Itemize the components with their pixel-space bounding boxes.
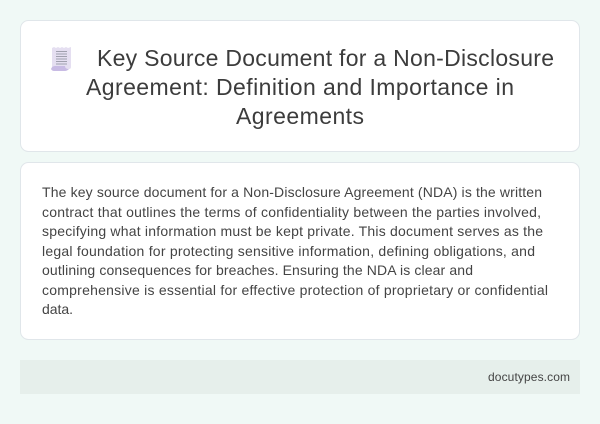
- text block: description: comprehensive is essential for effective protection of proprietary or confidential: [42, 282, 548, 298]
- text block: description: [42, 184, 548, 317]
- text block: description: contract that outlines the terms of confidentiality between the parties involved,: [42, 204, 541, 220]
- footer bar: [20, 360, 580, 394]
- icon: document scroll: [51, 47, 71, 71]
- heading: title: Agreement: Definition and Importance in: [86, 74, 514, 100]
- heading: title: Key Source Document for a Non-Disclosure: [97, 45, 554, 71]
- text block: description: data.: [42, 301, 73, 317]
- heading: title: Agreements: [236, 103, 364, 129]
- text block: description: outlining consequences for breaches. Ensuring the NDA is clear and: [42, 262, 473, 278]
- footer text: source: docutypes.com: [488, 370, 570, 384]
- panel: description card: [20, 162, 580, 340]
- panel: title card: [20, 20, 580, 152]
- heading: title: [86, 45, 554, 129]
- text block: description: legal foundation for protecting sensitive information, defining obligations, and: [42, 243, 535, 259]
- text block: description: The key source document for a Non-Disclosure Agreement (NDA) is the written: [42, 184, 542, 200]
- text block: description: specifying what information must be kept private. This document serves as the: [42, 223, 543, 239]
